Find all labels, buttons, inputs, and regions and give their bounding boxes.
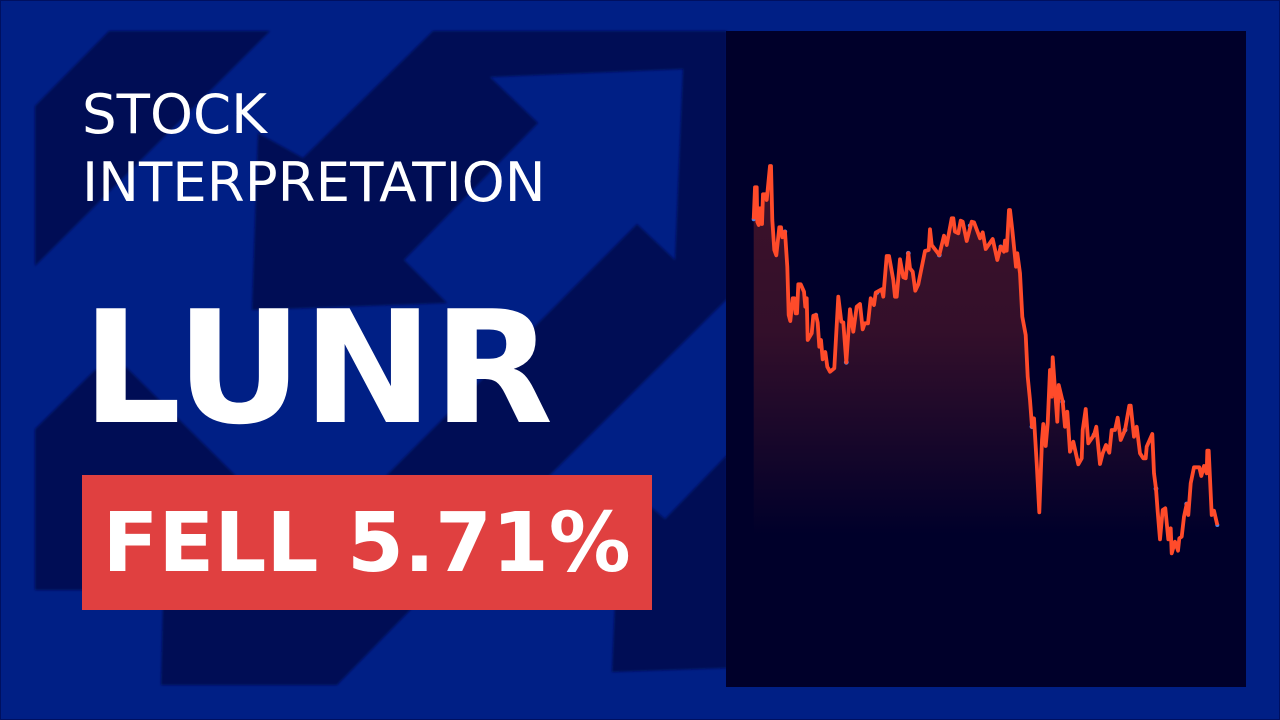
- title: stock interpretation: [82, 82, 546, 214]
- title: stock interpretation: STOCK: [82, 82, 268, 146]
- background arrows: [35, 31, 727, 685]
- panel: chart background: [726, 31, 1246, 687]
- callout: fell percentage: FELL 5.71%: [102, 496, 631, 591]
- chart data markers: [752, 217, 1219, 527]
- ticker: LUNR: LUNR: [82, 277, 553, 459]
- title: stock interpretation: INTERPRETATION: [82, 150, 546, 214]
- chart area fill: [754, 166, 1217, 560]
- chart line: [754, 166, 1217, 553]
- chart: LUNR price line: [752, 166, 1219, 560]
- callout: fell percentage: [82, 475, 652, 610]
